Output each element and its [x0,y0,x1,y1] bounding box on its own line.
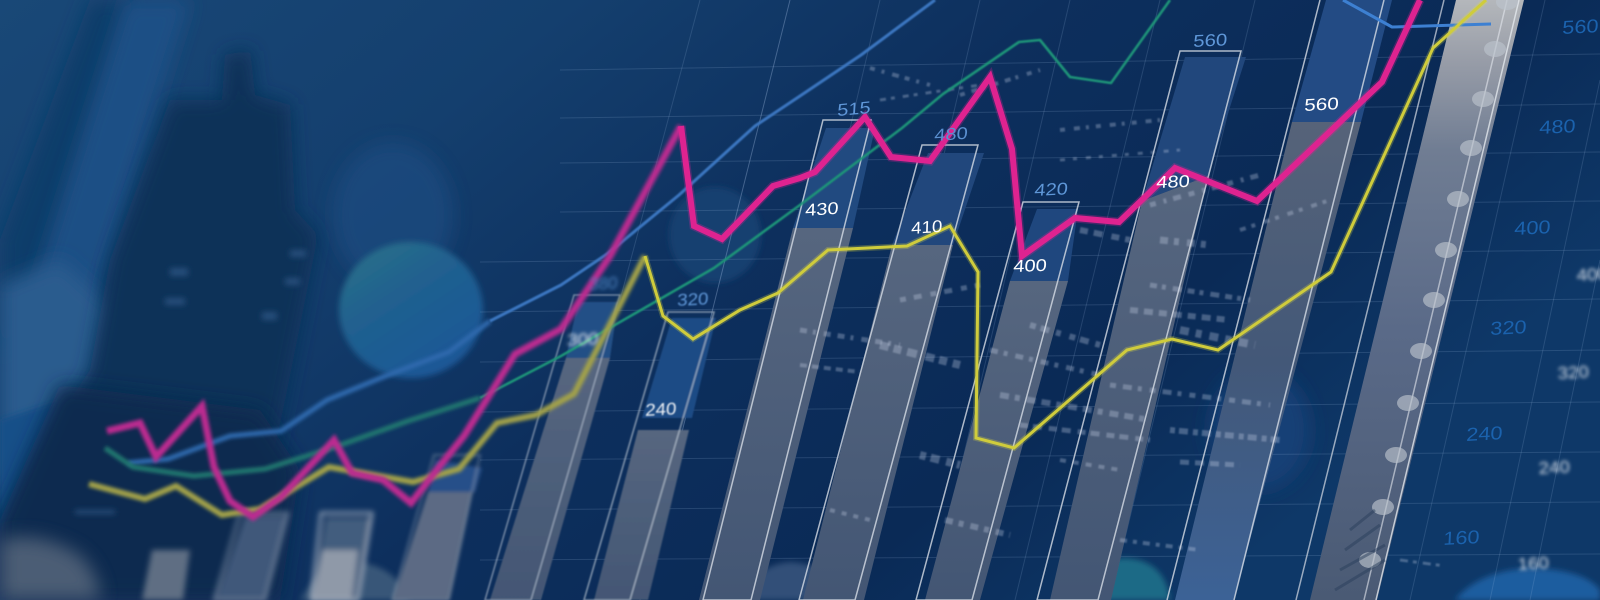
value labels on chart: 400 [1013,255,1048,276]
bar: 410 [799,145,984,600]
right axis labels blue: 400 [1514,217,1551,240]
bar: small left 2 [214,513,288,600]
right axis labels blurred white: 320 [1557,362,1589,383]
right axis labels blurred white [1517,264,1600,574]
right axis labels blue: 160 [1443,527,1480,550]
right axis labels blue: 480 [1539,116,1576,139]
bokeh: bottom glows [300,370,1600,600]
value labels on chart: 300 [567,329,599,350]
bokeh: upper dim circle [333,143,453,287]
bokeh: teal circle [339,242,483,378]
right axis labels blue: 240 [1466,423,1503,446]
city lights overlay [800,68,1445,566]
dots on bar [1359,0,1518,568]
value labels on chart: 410 [911,217,943,238]
value labels on chart: 380 [589,273,618,294]
right axis labels blurred white: 240 [1538,457,1570,478]
bar: 300-level blurred low [392,455,482,600]
bar: 480 [1037,51,1246,600]
bar: small left 1 [142,550,190,600]
right axis labels blue: 560 [1562,16,1599,39]
value labels on chart: 515 [837,97,871,120]
bar: tallest with dots [1296,0,1524,600]
value labels on chart: 480 [934,123,968,145]
value labels on chart [567,30,1339,420]
bar: 560 [1167,0,1392,600]
line: yellow [89,0,1486,515]
line: blue [128,0,1491,463]
value labels on chart: 430 [805,198,839,220]
bar: 400 [916,202,1079,600]
bar: 300 [485,295,620,600]
right axis labels blue [1443,16,1599,550]
value labels on chart: 560 [1304,95,1339,115]
blurred city backdrop [0,0,318,600]
bokeh: dim circle behind pink line [669,187,761,283]
value labels on chart: 560 [1193,30,1228,51]
building reflection at bottom [1335,510,1385,590]
line: teal [105,0,1170,476]
right axis labels blurred white: 160 [1517,553,1549,574]
value labels on chart: 480 [1156,171,1191,192]
value labels on chart: 420 [1034,179,1069,200]
line: magenta [107,0,1420,517]
right axis labels blue: 320 [1490,317,1527,340]
grid lines [480,0,1600,600]
bar: 240 [584,312,716,600]
bar: small left 3 [311,513,372,600]
value labels on chart: 240 [645,399,677,420]
bar: 430 [699,120,875,600]
value labels on chart: 320 [677,289,709,310]
